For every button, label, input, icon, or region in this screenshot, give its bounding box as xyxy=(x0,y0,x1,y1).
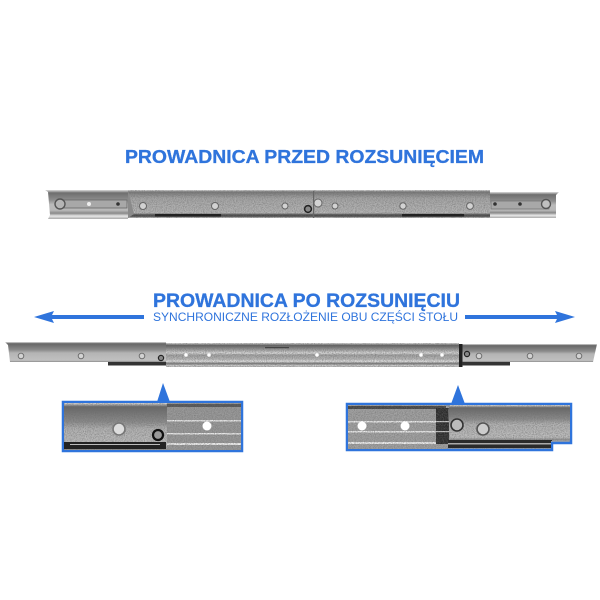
channel xyxy=(348,405,446,449)
title: before extension: PROWADNICA PRZED ROZSUNIĘCIEM xyxy=(125,147,484,167)
dark gap xyxy=(436,408,449,444)
detail pointer: left xyxy=(157,383,170,402)
left end of rail xyxy=(45,190,128,219)
plate bolts xyxy=(140,199,473,210)
detail pointer: right xyxy=(451,385,465,404)
channel holes xyxy=(358,422,366,430)
rail bolts xyxy=(18,353,582,359)
channel hole xyxy=(202,422,212,430)
plate bolt xyxy=(113,423,125,435)
arrow: right xyxy=(465,311,575,323)
left end slot and bolts xyxy=(55,199,127,209)
subtitle: SYNCHRONICZNE ROZŁOŻENIE OBU CZĘŚCI STOŁU xyxy=(153,309,458,324)
hex bolt xyxy=(451,419,463,431)
round bolt xyxy=(477,423,489,435)
lower slide xyxy=(448,440,552,448)
centre joint bolt xyxy=(305,206,311,212)
rail before extension xyxy=(45,190,559,219)
detail panel: left xyxy=(63,402,242,451)
arrow: left xyxy=(34,311,144,323)
pivot bolt xyxy=(153,430,163,440)
main plate xyxy=(128,190,490,218)
pivot bolts xyxy=(158,355,164,361)
title: after extension: PROWADNICA PO ROZSUNIĘCIU xyxy=(153,290,460,312)
extended centre channel xyxy=(166,343,459,367)
right end of rail xyxy=(484,192,559,218)
overlapping plate xyxy=(448,405,570,440)
detail panel: right xyxy=(347,404,571,450)
right rail section xyxy=(462,344,597,362)
left rail section xyxy=(5,342,166,362)
rail after extension xyxy=(5,342,597,367)
darker plate xyxy=(64,403,167,450)
right end slot and bolts xyxy=(491,200,550,209)
light channel xyxy=(167,403,241,450)
